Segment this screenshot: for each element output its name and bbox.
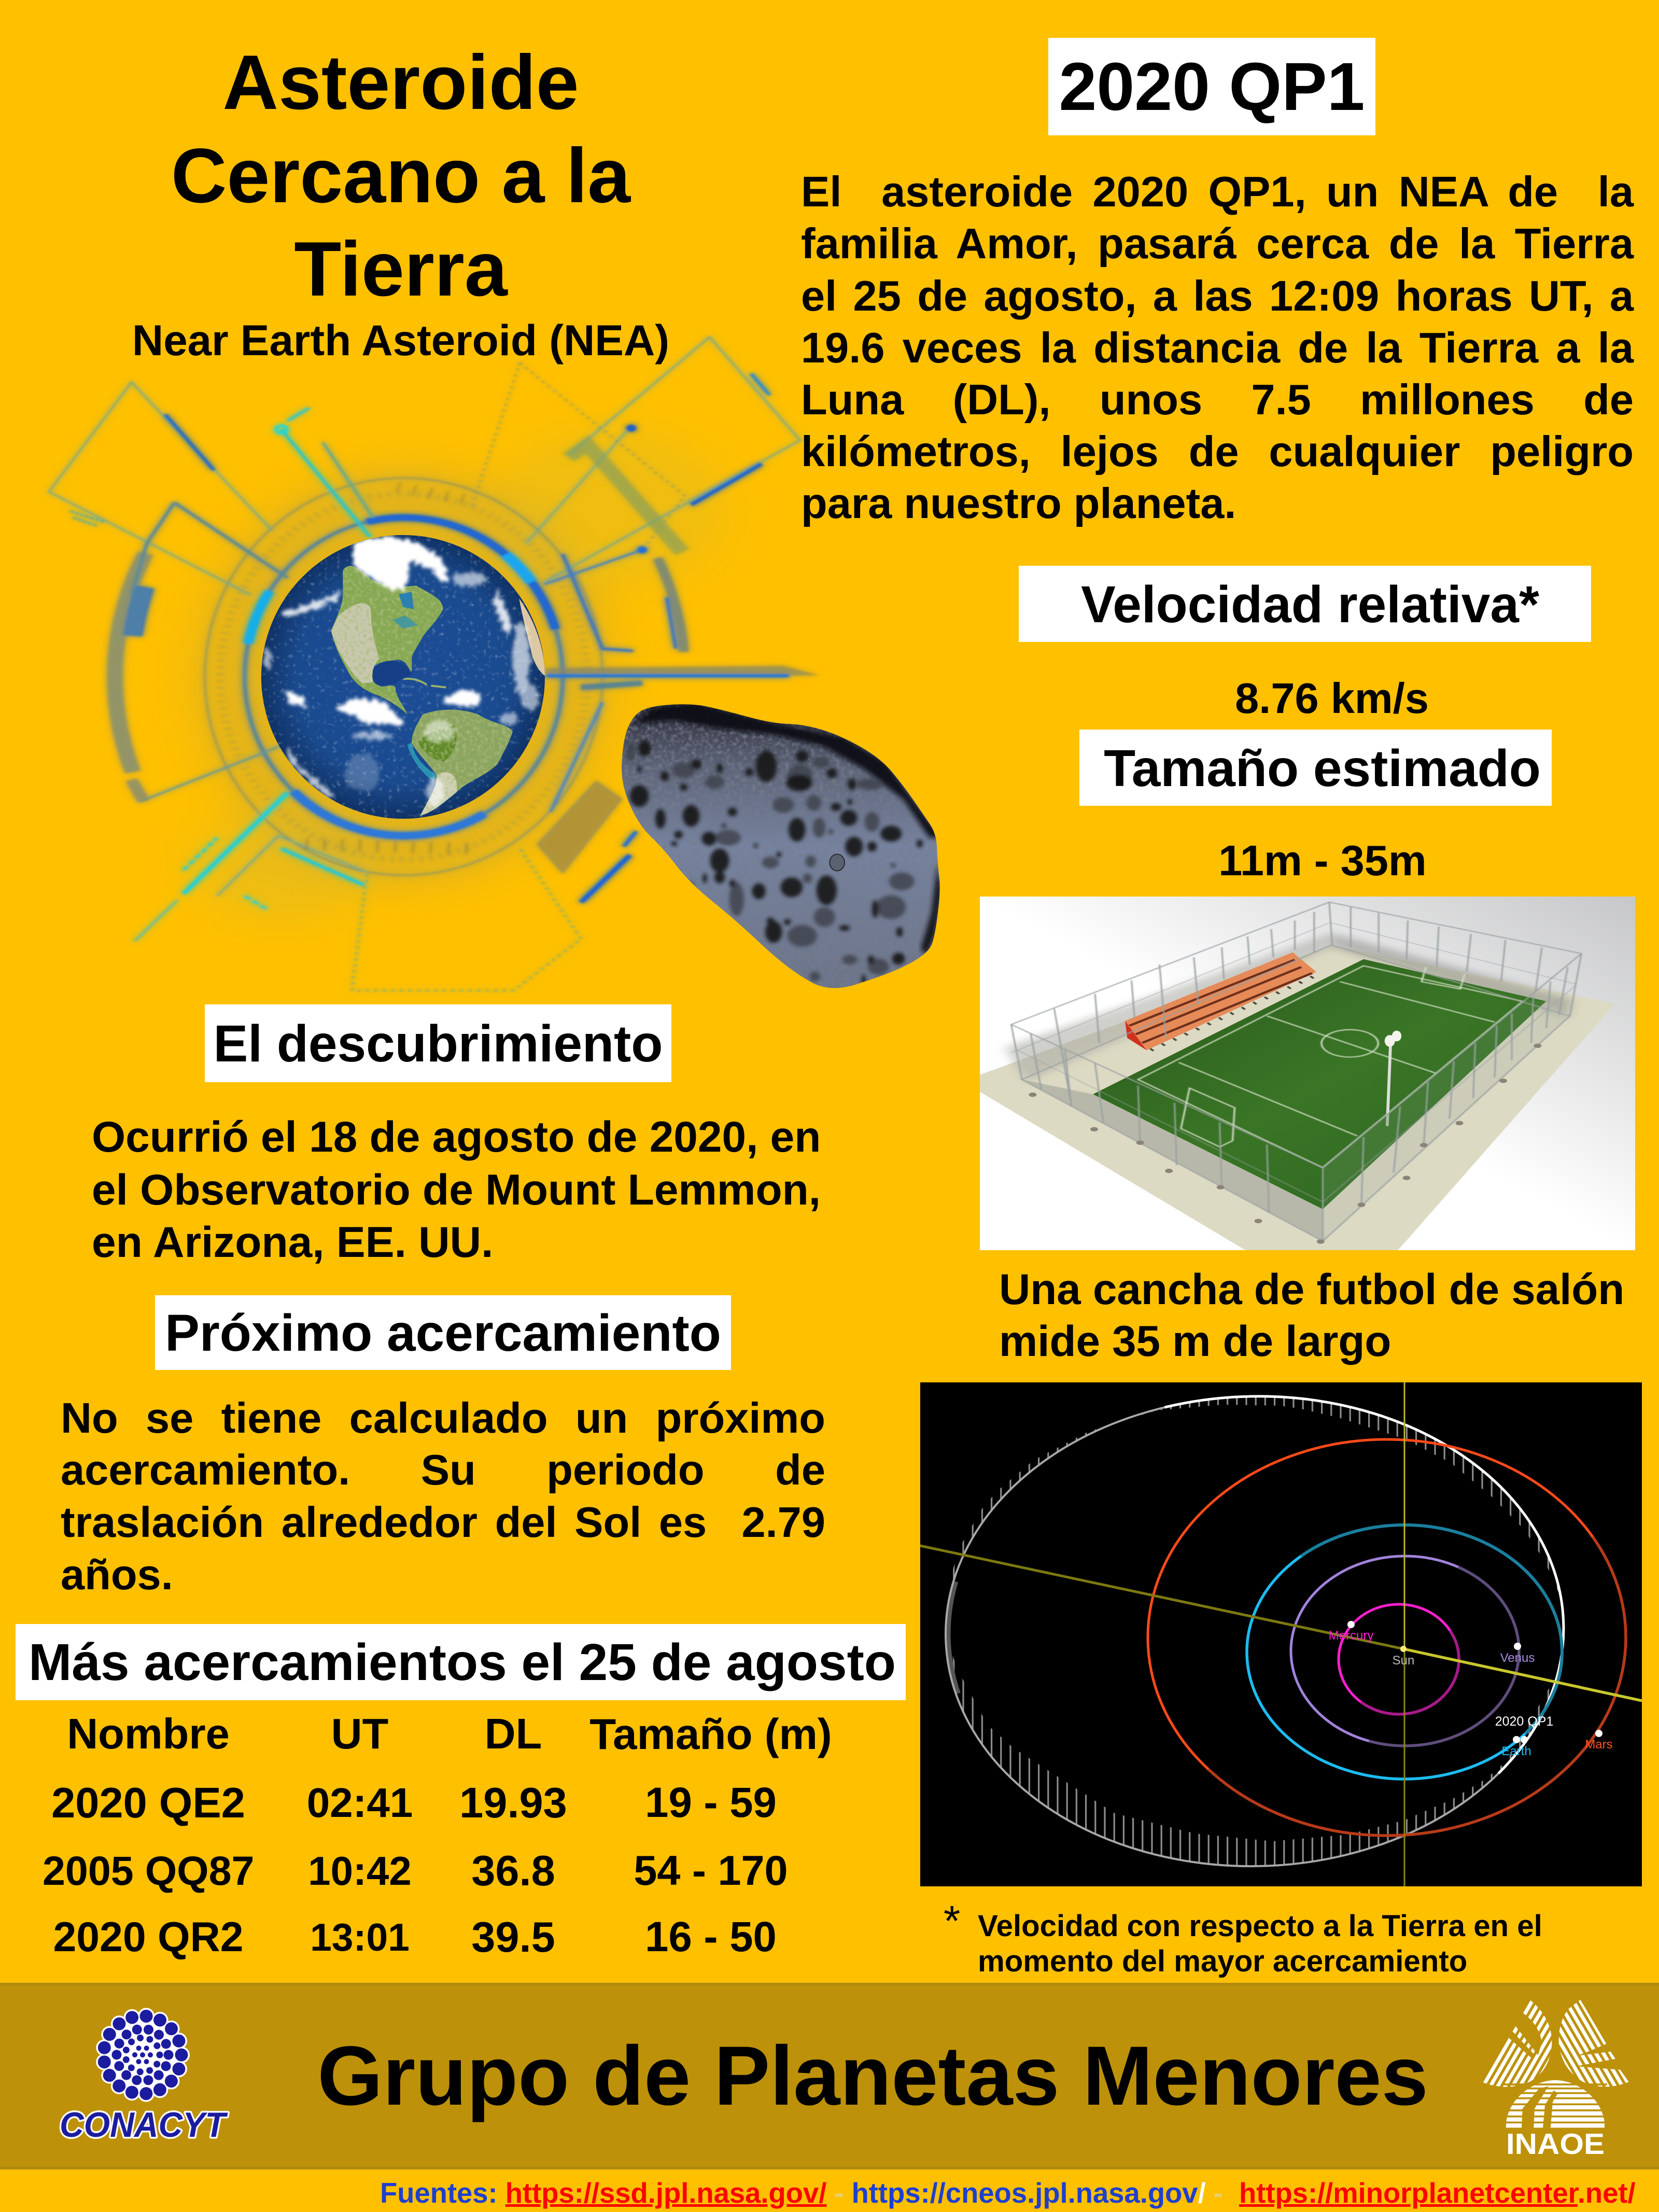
logo: CONACYT: CONACYT (60, 2105, 228, 2145)
text: discovery: el Observatorio de Mount Lemmon, (92, 1165, 821, 1213)
label: Velocidad relativa: Velocidad relativa* (1081, 576, 1539, 634)
text: next approach: años. (61, 1550, 173, 1599)
orbit: Earth (1247, 1525, 1562, 1779)
intro paragraph: 19.6 veces la distancia de la Tierra a la (801, 324, 1634, 372)
orbit: Mercury (1339, 1604, 1459, 1714)
sources line: Fuentes: https://ssd.jpl.nasa.gov/ - https://cneos.jpl.nasa.gov/ - https://minorplanetcenter.net/ (380, 2177, 1636, 2209)
clouds (264, 537, 540, 807)
value: size: 11m - 35m (1218, 836, 1427, 885)
row: 2020 QR2 (0, 1911, 881, 1963)
chart: orbit diagram: 2020 QP1 (1495, 1714, 1553, 1729)
caption: court: mide 35 m de largo (999, 1317, 1391, 1365)
intro paragraph: familia Amor, pasará cerca de la Tierra (801, 219, 1634, 268)
text: next approach: traslación alrededor del Sol es 2.79 (61, 1498, 825, 1546)
intro paragraph: kilómetros, lejos de cualquier peligro (801, 427, 1634, 475)
caption: court (999, 1263, 1637, 1367)
footnote: Velocidad con respecto a la Tierra en el (978, 1909, 1542, 1943)
row: 2005 QQ87 (0, 1845, 881, 1897)
chart: orbit diagram: Sun (1393, 1654, 1414, 1668)
footer band (0, 1983, 1659, 2169)
icon: Earth globe (261, 535, 545, 819)
text: discovery: Ocurrió el 18 de agosto de 2020, en (92, 1112, 821, 1161)
subtitle: Near Earth Asteroid (NEA) (132, 316, 669, 365)
footnote: momento del mayor acercamiento (978, 1944, 1467, 1978)
row: 2020 QR2: 39.5 (471, 1913, 555, 1961)
footnote (944, 1900, 1618, 1978)
photo: futsal court (980, 897, 1635, 1250)
text: next approach: No se tiene calculado un próximo (61, 1394, 825, 1442)
icon: asteroid (622, 704, 940, 988)
title: Cercano a la (171, 132, 630, 219)
intro paragraph: Luna (DL), unos 7.5 millones de (801, 375, 1634, 424)
row: 2020 QE2: 19 - 59 (645, 1779, 777, 1826)
intro paragraph: para nuestro planeta. (801, 479, 1236, 527)
illustration: HUD rings behind Earth (44, 334, 820, 993)
orbit: Venus (1291, 1556, 1519, 1746)
table header: Tamaño (m) (589, 1710, 832, 1758)
table: close approaches (0, 1708, 881, 1967)
title (171, 39, 631, 312)
row: 2020 QR2: 13:01 (310, 1915, 410, 1959)
footer title: Grupo de Planetas Menores (317, 2029, 1428, 2123)
logo: INAOE: INAOE (1506, 2128, 1605, 2161)
intro paragraph: El asteroide 2020 QP1, un NEA de la (801, 167, 1634, 216)
footnote: * (944, 1897, 960, 1945)
orbit: Mars (1148, 1439, 1626, 1836)
table header (0, 1708, 881, 1760)
row: 2020 QE2: 02:41 (307, 1780, 413, 1826)
title: Asteroide (222, 39, 579, 125)
table header: DL (485, 1710, 542, 1758)
text: next approach: acercamiento. Su periodo de (61, 1446, 825, 1494)
chart: orbit diagram: Earth (1501, 1744, 1531, 1758)
heading: 2020 QP1: 2020 QP1 (1059, 48, 1365, 124)
text: discovery (92, 1111, 828, 1268)
chart: orbit diagram: Mercury (1329, 1629, 1373, 1643)
text: next approach (61, 1392, 825, 1601)
row: 2005 QQ87: 2005 QQ87 (43, 1847, 254, 1894)
land (331, 566, 443, 715)
logo: CONACYT (52, 2001, 233, 2144)
row: 2020 QE2 (0, 1777, 881, 1829)
heading: El descubrimiento: El descubrimiento (214, 1015, 663, 1073)
value: velocity: 8.76 km/s (1235, 674, 1429, 722)
heading: Próximo acercamiento: Próximo acercamiento (165, 1304, 721, 1362)
row: 2005 QQ87: 54 - 170 (634, 1847, 788, 1894)
row: 2020 QE2: 2020 QE2 (51, 1779, 245, 1827)
row: 2005 QQ87: 36.8 (471, 1846, 555, 1895)
chart: orbit diagram (920, 1382, 1642, 1886)
table header: Nombre (67, 1710, 230, 1758)
row: 2020 QR2: 16 - 50 (645, 1913, 777, 1961)
chart: orbit diagram: Venus (1500, 1651, 1535, 1665)
row: 2020 QR2: 2020 QR2 (53, 1914, 243, 1961)
caption: court: Una cancha de futbol de salón (999, 1265, 1624, 1313)
heading: Más acercamientos: Más acercamientos el 25 de agosto (29, 1633, 896, 1691)
logo: INAOE (1462, 1991, 1638, 2167)
text: discovery: en Arizona, EE. UU. (92, 1217, 493, 1266)
title: Tierra (294, 226, 508, 312)
table header: UT (331, 1710, 388, 1758)
chart: orbit diagram: Mars (1585, 1738, 1613, 1752)
row: 2005 QQ87: 10:42 (308, 1848, 412, 1894)
intro paragraph (801, 167, 1634, 527)
orbit: 2020 QP1 (941, 1390, 1568, 1872)
intro paragraph: el 25 de agosto, a las 12:09 horas UT, a (801, 272, 1634, 320)
row: 2020 QE2: 19.93 (459, 1779, 567, 1827)
label: Tamaño estimado: Tamaño estimado (1104, 739, 1541, 797)
label: Velocidad relativa (1019, 566, 1591, 642)
